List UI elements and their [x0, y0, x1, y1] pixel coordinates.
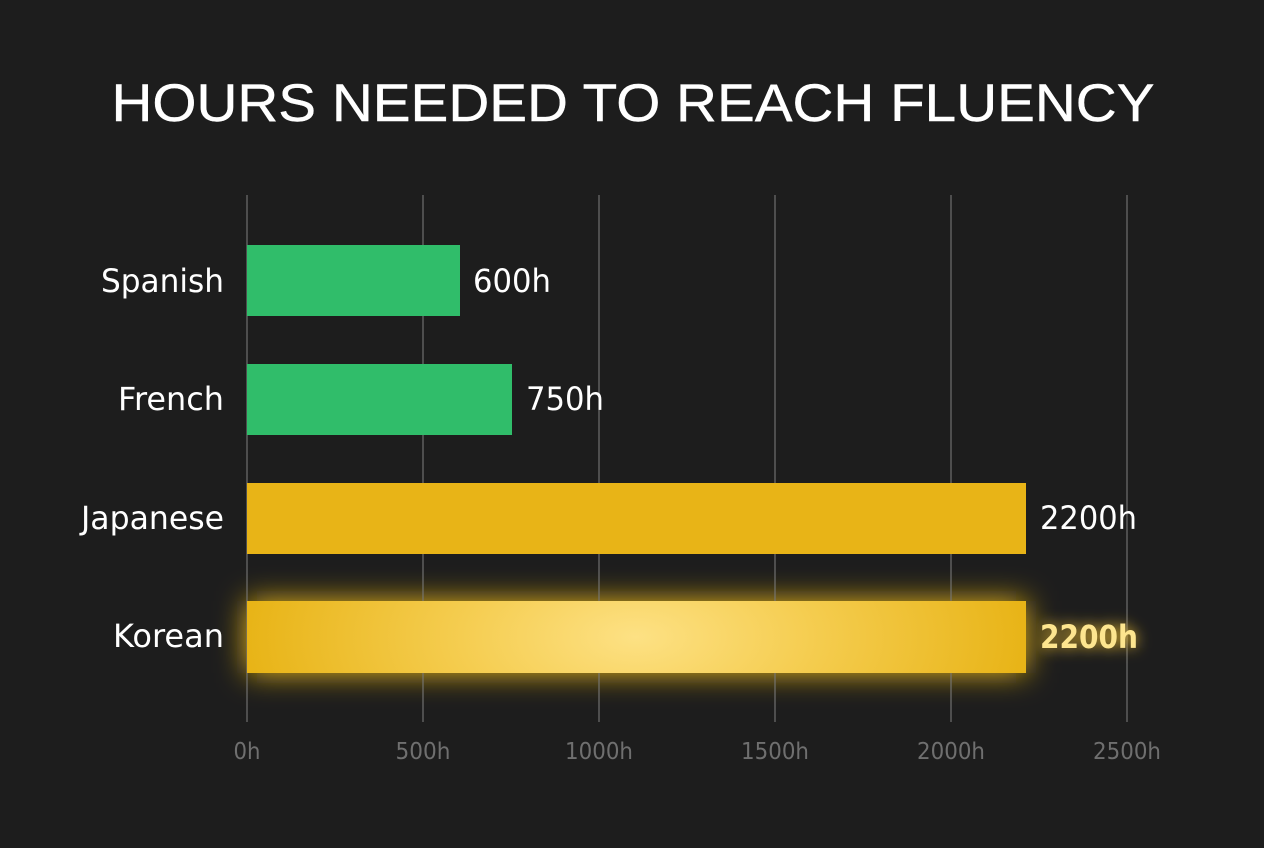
row: Korean: 2200h — [1040, 618, 1138, 656]
x-axis labels: 2000h — [917, 739, 985, 765]
x-axis labels: 500h — [396, 739, 450, 765]
row: Korean: Korean — [113, 617, 224, 655]
x-axis labels: 2500h — [1093, 739, 1161, 765]
row: Korean: 2200h — [1040, 618, 1138, 656]
row: Korean — [113, 601, 1138, 673]
row: Spanish: Spanish — [101, 262, 224, 300]
row: Japanese: Japanese — [79, 499, 224, 537]
row: French: 750h — [526, 380, 604, 418]
row: French — [118, 364, 604, 435]
x-axis labels — [234, 739, 1161, 765]
row: Japanese — [79, 483, 1137, 554]
x-axis labels: 0h — [234, 739, 260, 765]
row: Japanese: 2200h — [1040, 499, 1137, 537]
row: Spanish — [101, 245, 551, 316]
x-axis labels: 1000h — [565, 739, 633, 765]
row: French: French — [118, 380, 224, 418]
row: Spanish: 600h — [473, 262, 551, 300]
grid lines — [247, 195, 1127, 722]
x-axis labels: 1500h — [741, 739, 809, 765]
title: HOURS NEEDED TO REACH FLUENCY — [112, 74, 1154, 133]
korean bar glow — [247, 601, 1026, 673]
